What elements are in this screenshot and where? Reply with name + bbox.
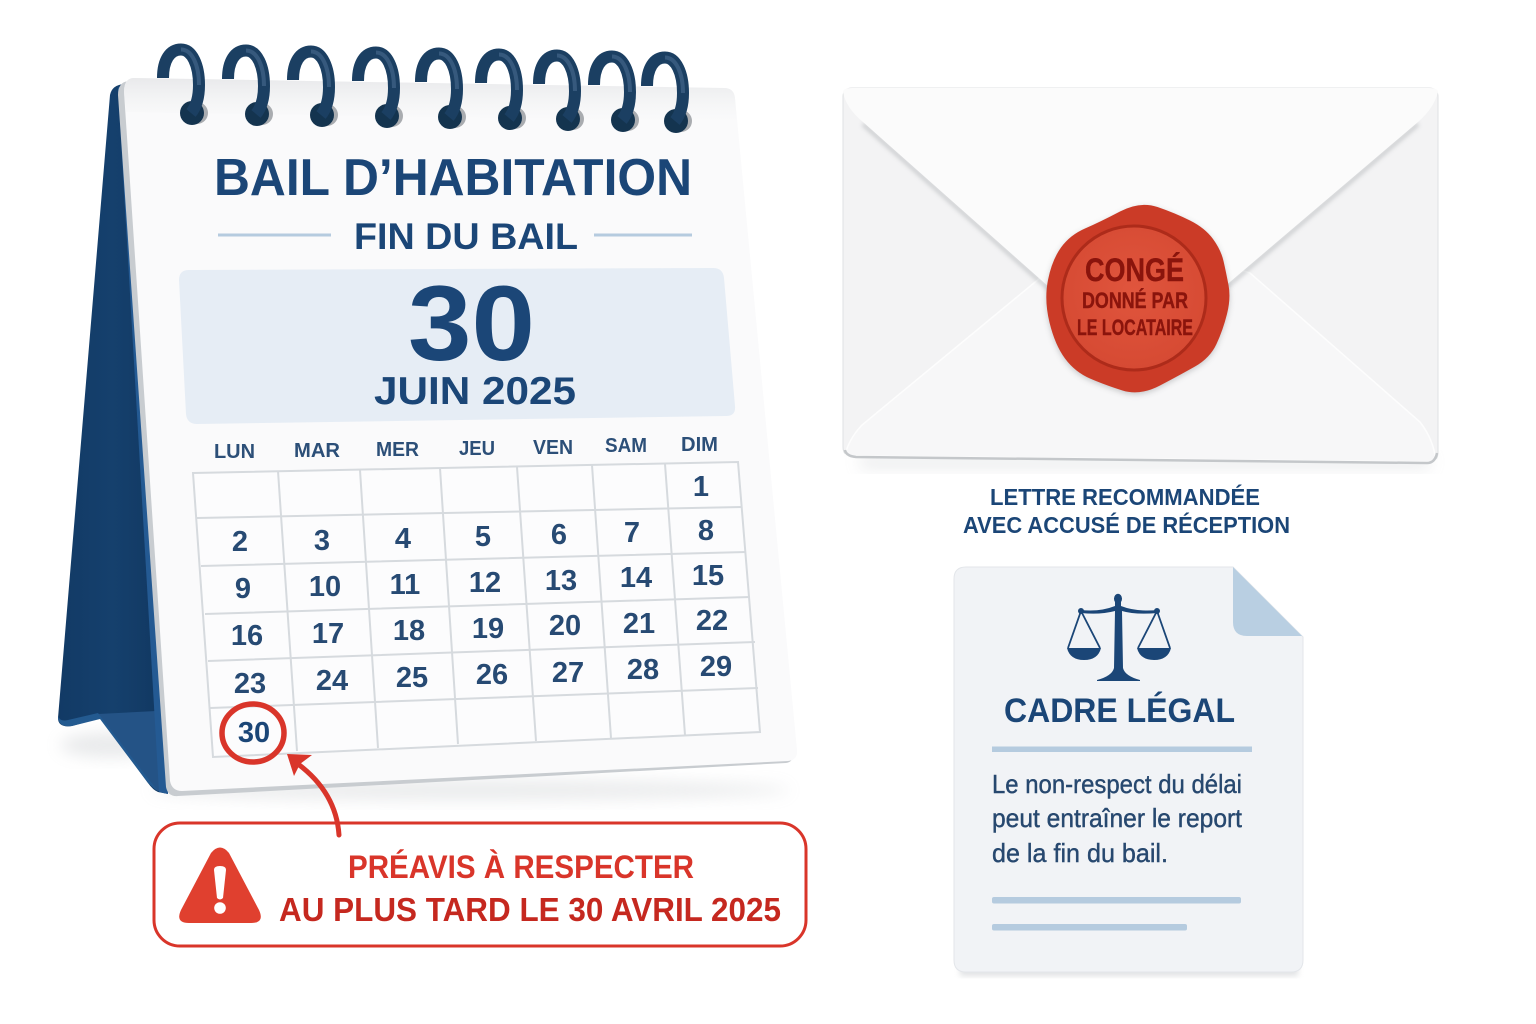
weekday headers: MER <box>376 439 420 461</box>
envelope lower folds <box>845 240 1436 462</box>
calendar day numbers: 22 <box>696 605 728 637</box>
calendar day numbers: 15 <box>692 560 724 592</box>
calendar grid <box>193 462 760 757</box>
calendar day numbers: 12 <box>469 567 501 599</box>
calendar day numbers: 5 <box>475 521 491 553</box>
day number: 30 <box>408 263 535 383</box>
seal text: DONNÉ PAR <box>1082 288 1188 313</box>
calendar day numbers: 10 <box>309 571 341 603</box>
envelope caption <box>963 483 1290 538</box>
subtitle with rules <box>218 216 692 257</box>
calendar day numbers: 11 <box>390 569 420 601</box>
icon: scales of justice <box>1067 594 1171 681</box>
calendar day numbers: 30 <box>238 717 270 749</box>
page fold <box>1233 567 1302 636</box>
calendar day numbers: 29 <box>700 651 732 683</box>
envelope flap <box>843 88 1438 352</box>
envelope body <box>843 88 1438 463</box>
calendar day numbers: 28 <box>627 654 659 686</box>
document body text: peut entraîner le report <box>992 803 1243 833</box>
calendar day numbers: 3 <box>314 525 330 557</box>
callout text: PRÉAVIS À RESPECTER <box>348 849 694 885</box>
calendar stand <box>58 84 168 794</box>
calendar day numbers: 23 <box>234 668 266 700</box>
red circle on day 30 <box>222 704 284 762</box>
weekday headers: SAM <box>605 435 647 457</box>
arrow to day 30 <box>287 754 339 835</box>
icon: warning triangle <box>179 848 261 923</box>
document body text: de la fin du bail. <box>992 838 1168 868</box>
calendar day numbers: 13 <box>545 565 577 597</box>
calendar day numbers: 25 <box>396 662 428 694</box>
calendar day numbers: 24 <box>316 665 348 697</box>
date panel <box>179 263 735 424</box>
calendar page <box>118 78 797 796</box>
calendar day numbers: 18 <box>393 615 425 647</box>
wax seal <box>1046 205 1229 394</box>
weekday headers: MAR <box>294 440 341 462</box>
document heading: CADRE LÉGAL <box>1004 692 1235 730</box>
calendar day numbers: 8 <box>698 515 714 547</box>
calendar day numbers: 20 <box>549 610 581 642</box>
calendar day numbers: 19 <box>472 613 504 645</box>
weekday headers: JEU <box>459 438 495 460</box>
calendar day numbers: 27 <box>552 657 584 689</box>
seal text <box>1077 252 1193 340</box>
weekday headers: VEN <box>533 437 573 459</box>
calendar day numbers: 26 <box>476 659 508 691</box>
envelope caption: AVEC ACCUSÉ DE RÉCEPTION <box>963 511 1290 538</box>
document body text: Le non-respect du délai <box>992 769 1242 799</box>
callout: notice deadline: AU PLUS TARD LE 30 AVRIL 2025 <box>279 891 781 928</box>
calendar day numbers: 9 <box>235 573 251 605</box>
calendar title: BAIL D’HABITATION <box>214 149 692 207</box>
panel: legal framework document <box>954 567 1303 976</box>
subtitle with rules: FIN DU BAIL <box>354 216 578 257</box>
calendar <box>58 50 797 800</box>
weekday headers <box>214 434 718 463</box>
envelope caption: LETTRE RECOMMANDÉE <box>990 483 1260 510</box>
calendar day numbers: 17 <box>312 618 344 650</box>
month and year: JUIN 2025 <box>374 370 576 413</box>
weekday headers: LUN <box>214 441 255 463</box>
calendar day numbers <box>231 471 732 749</box>
seal text: LE LOCATAIRE <box>1077 315 1193 340</box>
calendar day numbers: 4 <box>395 523 411 555</box>
calendar day numbers: 16 <box>231 620 263 652</box>
seal text: CONGÉ <box>1085 252 1184 288</box>
binding rings <box>163 50 692 133</box>
weekday headers: DIM <box>681 434 718 456</box>
callout: notice deadline <box>154 823 806 946</box>
calendar day numbers: 2 <box>232 526 248 558</box>
calendar day numbers: 1 <box>693 471 709 503</box>
calendar day numbers: 14 <box>620 562 652 594</box>
calendar day numbers: 21 <box>623 608 655 640</box>
calendar day numbers: 6 <box>551 519 567 551</box>
document body text <box>992 769 1243 868</box>
calendar day numbers: 7 <box>624 517 640 549</box>
envelope <box>843 88 1438 468</box>
